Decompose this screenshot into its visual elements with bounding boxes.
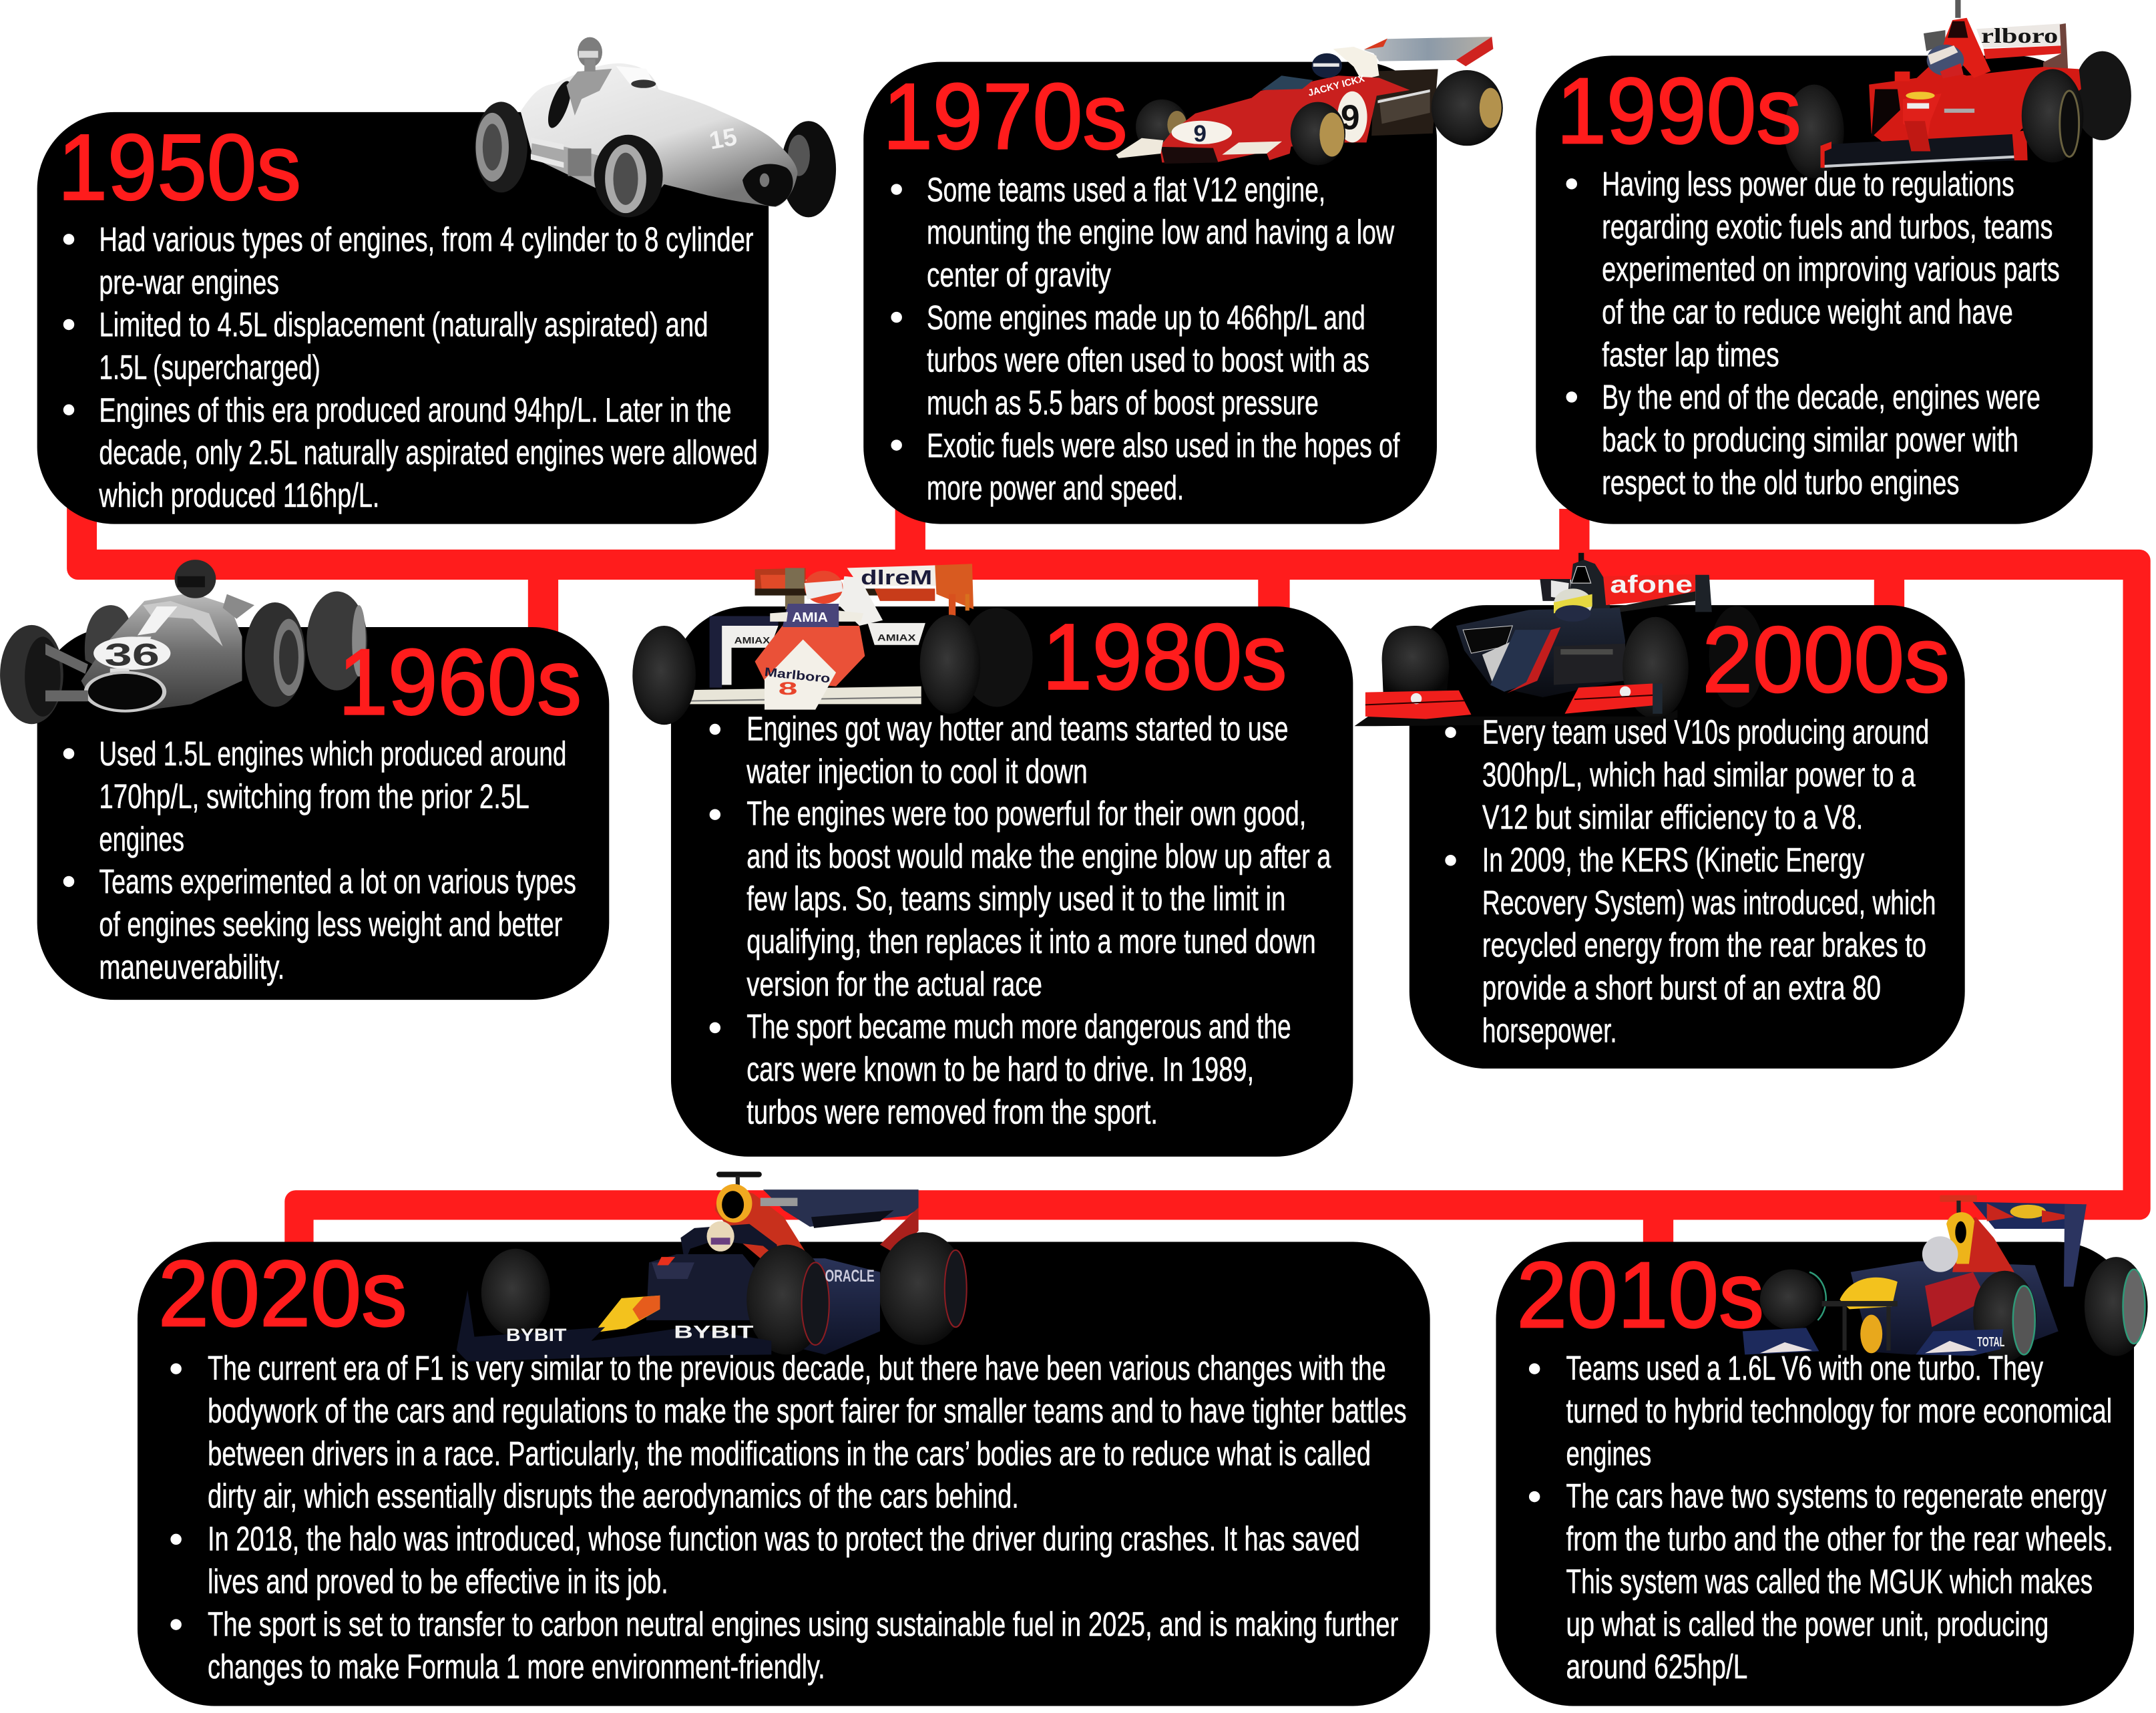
bullet list: 2020s: dirty air, which essentially disrupts the aerodynamics of the cars behind. <box>208 1477 1019 1515</box>
icon: 1990s race car: rlboro <box>1981 24 2058 47</box>
bullet list: 1990s: Having less power due to regulations <box>1602 165 2014 203</box>
bullet list: 2010s <box>1529 1349 2113 1686</box>
icon: 2010s race car <box>1743 1195 2148 1362</box>
icon: 2010s race car: TOTAL <box>1977 1334 2004 1350</box>
bullet list: 1950s: Engines of this era produced around 94hp/L. Later in the <box>99 391 732 429</box>
bullet list: 2000s: In 2009, the KERS (Kinetic Energy <box>1482 841 1865 879</box>
bullet list: 2020s: lives and proved to be effective in its job. <box>208 1562 668 1600</box>
icon: 1980s race car <box>632 564 1033 725</box>
panel background <box>671 606 1353 1157</box>
icon: 1970s race car: JACKY ICKX <box>1307 73 1366 99</box>
bullet list: 1960s: maneuverability. <box>99 948 284 986</box>
bullet list: 1950s <box>63 220 758 514</box>
icon: 1960s race car <box>0 560 367 724</box>
icon: 1980s race car: dlreM <box>861 566 932 589</box>
bullet list: 2020s: The current era of F1 is very similar to the previous decade, but there have been various changes with the <box>208 1349 1386 1387</box>
bullet list: 1980s: and its boost would make the engine blow up after a <box>746 837 1331 875</box>
bullet list: 1970s: much as 5.5 bars of boost pressure <box>927 383 1319 421</box>
bullet list: 1950s: Limited to 4.5L displacement (naturally aspirated) and <box>99 306 708 344</box>
icon: 2000s race car: afone <box>1610 570 1693 598</box>
bullet list: 1980s: cars were known to be hard to drive. In 1989, <box>746 1051 1254 1089</box>
bullet list: 2000s <box>1445 713 1936 1049</box>
bullet list: 1950s: decade, only 2.5L naturally aspirated engines were allowed <box>99 433 758 471</box>
icon: 1970s race car <box>1116 37 1503 165</box>
bullet list: 1980s: turbos were removed from the sport. <box>746 1093 1158 1131</box>
bullet list: 2000s: horsepower. <box>1482 1011 1617 1049</box>
bullet list: 1970s: Exotic fuels were also used in the hopes of <box>927 426 1400 464</box>
heading: 2020s: 2020s <box>158 1241 407 1346</box>
panel: 2000s <box>1354 553 1965 1069</box>
icon: 1980s race car: Marlboro <box>764 664 831 685</box>
bullet list: 2020s: between drivers in a race. Particularly, the modifications in the cars’ bodies are to reduce what is called <box>208 1435 1371 1473</box>
icon: 2020s race car: BYBIT <box>506 1325 567 1345</box>
icon: 2020s race car: ORACLE <box>825 1268 875 1286</box>
bullet list: 1970s: turbos were often used to boost with as <box>927 341 1369 379</box>
heading: 1970s: 1970s <box>883 63 1128 168</box>
timeline connector <box>67 495 2151 1258</box>
panel: 2010s <box>1496 1195 2148 1706</box>
panel: 1960s <box>0 560 609 1000</box>
panel: 1990s <box>1536 0 2131 524</box>
icon: 1970s race car: 9 <box>1341 98 1359 137</box>
icon: 1990s race car <box>1784 0 2131 178</box>
bullet list: 1960s <box>63 735 576 986</box>
bullet list: 1980s: The sport became much more dangerous and the <box>746 1008 1291 1046</box>
panel background <box>37 112 769 524</box>
heading: 1990s: 1990s <box>1556 58 1801 163</box>
bullet list: 1980s: qualifying, then replaces it into a more tuned down <box>746 922 1316 960</box>
bullet list: 1980s: The engines were too powerful for their own good, <box>746 795 1306 833</box>
bullet list: 1980s: few laps. So, teams simply used it to the limit in <box>746 880 1285 918</box>
icon: 1980s race car: 8 <box>779 679 798 699</box>
panel: 1980s <box>632 564 1353 1157</box>
bullet list: 2020s: The sport is set to transfer to carbon neutral engines using sustainable fuel in 2025, and is making further <box>208 1605 1398 1643</box>
bullet list: 2020s: changes to make Formula 1 more environment-friendly. <box>208 1648 825 1686</box>
bullet list: 2000s: V12 but similar efficiency to a V8. <box>1482 798 1863 836</box>
icon: 2020s race car: BYBIT <box>674 1322 754 1342</box>
bullet list: 1960s: engines <box>99 820 184 858</box>
bullet list: 2020s: In 2018, the halo was introduced, whose function was to protect the driver during crashes. It has saved <box>208 1520 1360 1558</box>
bullet list: 2010s: engines <box>1566 1435 1651 1473</box>
bullet list: 1980s <box>710 710 1331 1131</box>
bullet list: 1960s: Used 1.5L engines which produced around <box>99 735 566 773</box>
icon: 1980s race car: AMIAX <box>734 636 770 646</box>
bullet list: 1970s: more power and speed. <box>927 469 1184 507</box>
bullet list: 1960s: of engines seeking less weight and better <box>99 906 562 944</box>
icon: 1980s race car: AMIAX <box>877 633 916 643</box>
bullet list: 2020s <box>170 1349 1407 1686</box>
bullet list: 1990s: back to producing similar power with <box>1602 421 2018 459</box>
icon: 2020s race car <box>457 1171 967 1362</box>
panel background <box>1410 605 1965 1069</box>
heading: 2010s: 2010s <box>1516 1242 1764 1347</box>
bullet list: 1990s <box>1566 165 2060 502</box>
bullet list: 1970s: center of gravity <box>927 256 1111 294</box>
bullet list: 2000s: Every team used V10s producing around <box>1482 713 1929 751</box>
panel background <box>863 62 1437 524</box>
bullet list: 1970s: Some teams used a flat V12 engine, <box>927 170 1325 208</box>
panel background <box>37 627 609 1000</box>
bullet list: 1980s: version for the actual race <box>746 965 1042 1003</box>
bullet list: 1970s: Some engines made up to 466hp/L and <box>927 299 1365 337</box>
bullet list: 1960s: Teams experimented a lot on various types <box>99 863 576 901</box>
bullet list: 1970s: mounting the engine low and having a low <box>927 213 1394 251</box>
bullet list: 1960s: 170hp/L, switching from the prior 2.5L <box>99 777 529 815</box>
bullet list: 1950s: which produced 116hp/L. <box>99 476 379 514</box>
bullet list: 2020s: bodywork of the cars and regulations to make the sport fairer for smaller teams and to have tighter battles <box>208 1392 1407 1430</box>
panel background <box>138 1242 1430 1706</box>
bullet list: 1990s: respect to the old turbo engines <box>1602 463 1959 502</box>
icon: 1960s race car: 36 <box>105 638 160 673</box>
bullet list: 1980s: Engines got way hotter and teams started to use <box>746 710 1289 748</box>
bullet list: 2000s: provide a short burst of an extra 80 <box>1482 968 1881 1006</box>
bullet list: 2000s: 300hp/L, which had similar power to a <box>1482 755 1916 793</box>
icon: 2000s race car <box>1354 553 1764 726</box>
heading: 1960s: 1960s <box>339 629 582 734</box>
heading: 1980s: 1980s <box>1042 604 1287 709</box>
bullet list: 2000s: recycled energy from the rear brakes to <box>1482 926 1926 964</box>
icon: 1950s race car: 15 <box>707 122 739 154</box>
bullet list: 1990s: faster lap times <box>1602 335 1779 373</box>
bullet list: 1950s: 1.5L (supercharged) <box>99 349 320 387</box>
bullet list: 1980s: water injection to cool it down <box>746 753 1088 791</box>
bullet list: 1970s <box>891 170 1400 507</box>
icon: 1980s race car: AMIA <box>792 610 828 625</box>
heading: 1950s: 1950s <box>58 115 301 220</box>
bullet list: 1950s: pre-war engines <box>99 263 279 301</box>
heading: 2000s: 2000s <box>1702 607 1950 712</box>
panel background <box>1536 55 2093 524</box>
panel background <box>1496 1242 2134 1706</box>
bullet list: 1990s: of the car to reduce weight and have <box>1602 293 2013 331</box>
panel: 1950s <box>37 37 836 524</box>
icon: 1950s race car <box>475 37 836 217</box>
bullet list: 2010s: around 625hp/L <box>1566 1648 1747 1686</box>
panel: 1970s <box>863 37 1503 524</box>
bullet list: 2000s: Recovery System) was introduced, which <box>1482 884 1936 922</box>
panel: 2020s <box>138 1171 1430 1706</box>
icon: 1970s race car: 9 <box>1193 121 1207 147</box>
bullet list: 1950s: Had various types of engines, from 4 cylinder to 8 cylinder <box>99 220 754 258</box>
